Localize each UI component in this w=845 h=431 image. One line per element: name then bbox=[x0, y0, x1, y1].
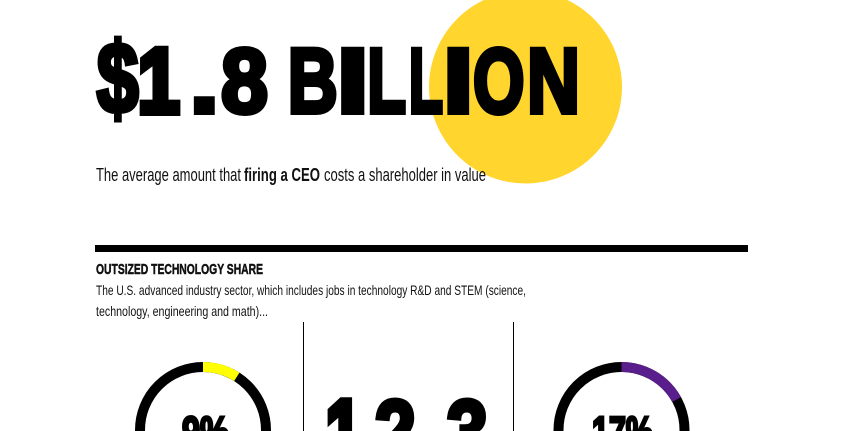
subtitle: The average amount that bbox=[96, 165, 241, 185]
subtitle: firing a CEO bbox=[244, 165, 320, 185]
title: $1.8 billion: 8 bbox=[221, 30, 268, 132]
title: $1.8 billion: N bbox=[527, 30, 580, 132]
section description: The U.S. advanced industry sector, which includes jobs in technology R&D and STEM (science, bbox=[96, 282, 526, 298]
title: $1.8 billion: I bbox=[443, 30, 474, 132]
title: $1.8 billion: I bbox=[336, 30, 369, 132]
column divider bbox=[303, 322, 304, 431]
arc: 9% highlighted bbox=[203, 367, 237, 377]
section description: technology, engineering and math)... bbox=[96, 303, 268, 319]
title: $1.8 billion: $ bbox=[97, 22, 139, 134]
title: $1.8 billion: O bbox=[473, 30, 524, 132]
title: $1.8 billion: B bbox=[288, 30, 338, 132]
subtitle: costs a shareholder in value bbox=[324, 165, 486, 185]
donut chart: 17% bbox=[558, 367, 684, 431]
big number: 12.3 bbox=[326, 382, 488, 431]
column divider bbox=[513, 322, 514, 431]
title: $1.8 billion bbox=[97, 22, 580, 134]
title: $1.8 billion: 1 bbox=[138, 30, 180, 132]
title: $1.8 billion: L bbox=[367, 30, 406, 132]
section rule bbox=[95, 245, 748, 252]
title: $1.8 billion: . bbox=[190, 30, 219, 132]
title: $1.8 billion: L bbox=[409, 30, 443, 132]
subtitle bbox=[96, 165, 486, 185]
section heading: OUTSIZED TECHNOLOGY SHARE bbox=[96, 262, 263, 278]
donut chart: 9% bbox=[140, 367, 266, 431]
icon: yellow circle bbox=[429, 0, 622, 184]
arc: 17% highlighted bbox=[622, 367, 677, 400]
section description bbox=[96, 282, 526, 319]
